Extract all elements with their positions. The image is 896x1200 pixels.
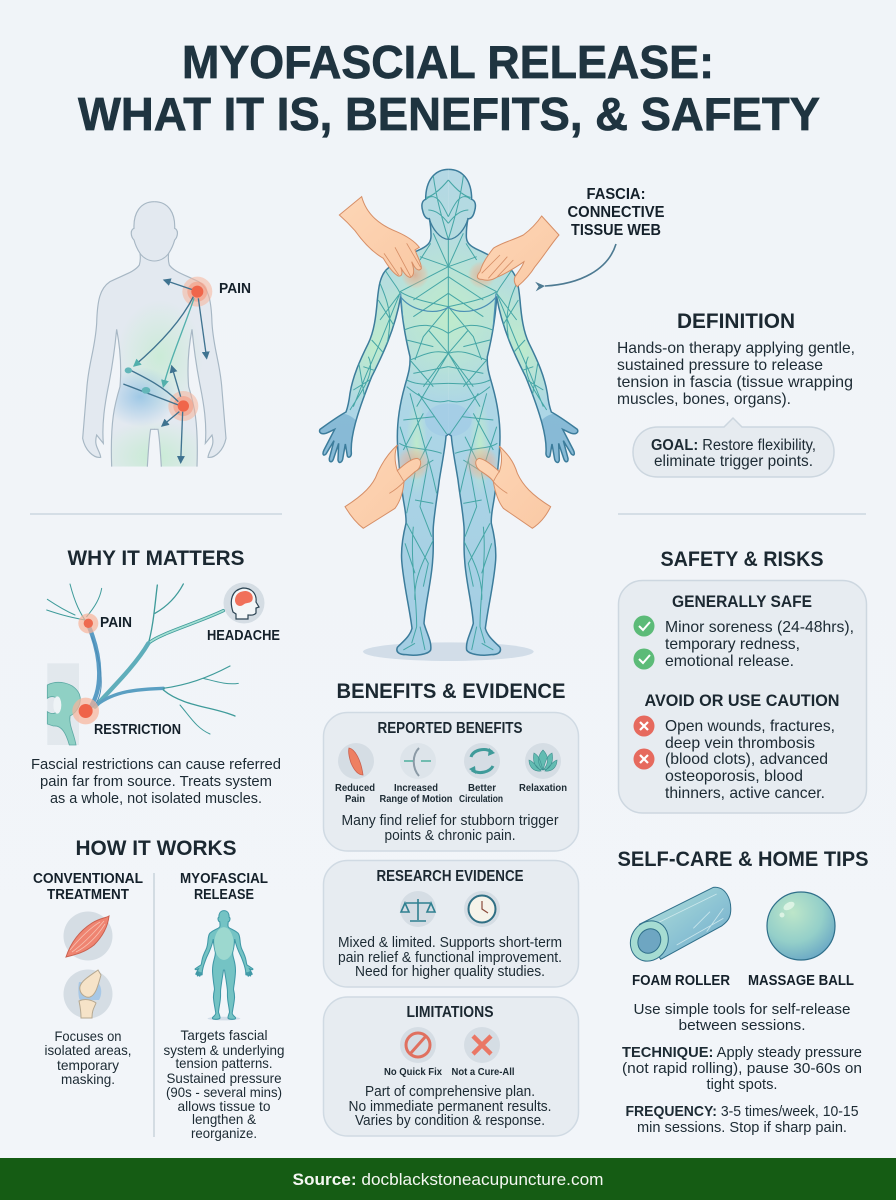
callout: goal (633, 418, 834, 477)
text: definition: muscles, bones, organs). (617, 391, 791, 408)
panel: safety and risks: GENERALLY SAFE (672, 592, 812, 611)
panel: reported benefits: Reduced (335, 782, 375, 794)
column: conventional treatment: Focuses on (54, 1028, 122, 1044)
hand: lower right (476, 446, 551, 528)
icon: knee joint (64, 970, 112, 1018)
icon: range of motion (400, 743, 436, 779)
panel: research evidence: RESEARCH EVIDENCE (376, 868, 524, 885)
column: myofascial release: reorganize. (191, 1125, 257, 1141)
label: fascia: CONNECTIVE (568, 204, 665, 221)
text: frequency: min sessions. Stop if sharp pain. (637, 1119, 847, 1136)
text: technique: TECHNIQUE: Apply steady pressure (622, 1044, 862, 1061)
icon: cross (634, 716, 654, 736)
panel: safety and risks: Minor soreness (24-48hrs), (665, 619, 854, 636)
icon: cross (634, 748, 654, 770)
panel: reported benefits: Relaxation (519, 782, 567, 794)
hand: upper right (477, 216, 559, 287)
hand: upper left (339, 197, 421, 277)
panel: limitations: No immediate permanent results. (348, 1098, 552, 1115)
panel: safety and risks: (blood clots), advanced (665, 751, 828, 768)
panel: research evidence (324, 860, 578, 987)
text: frequency: FREQUENCY: 3-5 times/week, 10-15 (626, 1103, 858, 1120)
panel: reported benefits: Circulation (459, 793, 503, 805)
panel: research evidence: pain relief & functional improvement. (338, 949, 562, 966)
panel: safety and risks: temporary redness, (665, 636, 800, 653)
panel: safety and risks: emotional release. (665, 653, 794, 670)
heading: benefits and evidence: BENEFITS & EVIDENCE (336, 680, 566, 703)
panel: limitations (324, 997, 578, 1136)
heading: why it matters: WHY IT MATTERS (68, 547, 244, 570)
panel: reported benefits: REPORTED BENEFITS (378, 720, 523, 737)
column: conventional treatment: CONVENTIONAL (33, 871, 143, 887)
panel: safety and risks: thinners, active cancer. (665, 785, 825, 802)
text: technique (622, 1044, 862, 1093)
column: conventional treatment: TREATMENT (47, 887, 129, 903)
column: myofascial release: RELEASE (194, 887, 254, 903)
column: conventional treatment: masking. (61, 1071, 115, 1087)
column: myofascial release (164, 871, 284, 1141)
column: myofascial release: (90s - several mins) (166, 1084, 282, 1100)
text: self-care intro (634, 1001, 850, 1034)
panel: safety and risks: osteoporosis, blood (665, 768, 803, 785)
label: fascia (568, 186, 665, 239)
text: why it matters: Fascial restrictions can cause referred (31, 756, 281, 773)
column: myofascial release: allows tissue to (178, 1098, 271, 1114)
icon: headache (224, 582, 264, 624)
arrow: fascia pointer (545, 244, 616, 286)
hand: lower left (345, 445, 421, 528)
icon: foam roller (623, 887, 731, 968)
label: pain: PAIN (219, 281, 251, 297)
text: why it matters: as a whole, not isolated muscles. (50, 790, 262, 807)
title: WHAT IT IS, BENEFITS, & SAFETY (78, 88, 820, 140)
panel: reported benefits: Many find relief for stubborn trigger (342, 812, 558, 829)
panel: limitations: LIMITATIONS (406, 1004, 494, 1021)
text: frequency (626, 1103, 858, 1136)
column: conventional treatment: temporary (57, 1057, 119, 1073)
text: self-care intro: Use simple tools for self-release (634, 1001, 850, 1018)
callout: goal: eliminate trigger points. (654, 453, 813, 470)
callout: goal: GOAL: Restore flexibility, (651, 437, 816, 454)
body (317, 169, 581, 655)
icon: muscle (64, 912, 112, 960)
fascia web lines (350, 176, 547, 650)
pressure glows (396, 261, 499, 481)
panel: reported benefits: Increased (394, 782, 438, 794)
icon: scales (400, 891, 436, 927)
column: conventional treatment (33, 871, 143, 1087)
heading: definition: DEFINITION (677, 310, 795, 333)
icon: small body (195, 911, 253, 1020)
text: definition: sustained pressure to release (617, 357, 823, 374)
panel: reported benefits: Range of Motion (380, 793, 452, 805)
icon: check (634, 616, 654, 636)
text: technique: (not rapid rolling), pause 30-60s on (622, 1060, 862, 1077)
text: definition: tension in fascia (tissue wrapping (617, 374, 853, 391)
text: why it matters: pain far from source. Treats system (40, 773, 272, 790)
divider right (618, 513, 866, 515)
label: foam roller: FOAM ROLLER (632, 973, 730, 989)
title: MYOFASCIAL RELEASE: (182, 36, 714, 88)
panel: reported benefits (324, 712, 578, 851)
label: fascia: FASCIA: (586, 186, 646, 203)
label: restriction: RESTRICTION (94, 722, 181, 738)
panel: safety and risks: AVOID OR USE CAUTION (644, 691, 840, 710)
label: headache: HEADACHE (207, 628, 280, 644)
column: myofascial release: MYOFASCIAL (180, 871, 268, 887)
panel: limitations: No Quick Fix (384, 1066, 442, 1078)
label: fascia: TISSUE WEB (571, 222, 661, 239)
footer: Source: docblackstoneacupuncture.com (292, 1170, 604, 1189)
panel: limitations: Not a Cure-All (452, 1066, 515, 1078)
icon: relaxation (525, 743, 561, 779)
figure: referred pain body (82, 201, 227, 467)
panel: research evidence: Mixed & limited. Supports short-term (338, 934, 562, 951)
icon: cross (464, 1027, 500, 1063)
icon: no sign (400, 1027, 436, 1063)
divider: how it works columns (153, 873, 155, 1137)
panel: safety and risks (618, 580, 866, 813)
panel: reported benefits: Pain (345, 793, 365, 805)
text: technique: tight spots. (706, 1076, 778, 1093)
ground shadow (363, 642, 534, 661)
divider left (30, 513, 282, 515)
column: myofascial release: Sustained pressure (166, 1070, 282, 1086)
panel: limitations: Part of comprehensive plan. (365, 1083, 535, 1100)
panel: safety and risks: Open wounds, fractures, (665, 718, 835, 735)
column: myofascial release: lengthen & (192, 1111, 257, 1127)
title (78, 36, 820, 140)
column: myofascial release: system & underlying (164, 1042, 284, 1058)
icon: check (634, 648, 654, 670)
text: self-care intro: between sessions. (678, 1017, 806, 1034)
panel: research evidence: Need for higher quality studies. (355, 963, 545, 980)
column: myofascial release: tension patterns. (176, 1055, 272, 1071)
footer (0, 1158, 896, 1200)
text: why it matters (31, 756, 281, 807)
icon: massage ball (767, 892, 835, 960)
text: definition (617, 340, 855, 408)
heading: how it works: HOW IT WORKS (76, 837, 236, 860)
label: massage ball: MASSAGE BALL (748, 973, 854, 989)
diagram: fascial network (47, 584, 238, 745)
icon: clock (464, 891, 500, 927)
label: network pain: PAIN (100, 615, 132, 631)
icon: reduced pain (338, 743, 374, 779)
panel: reported benefits: Better (468, 782, 496, 794)
column: myofascial release: Targets fascial (180, 1027, 268, 1043)
panel: reported benefits: points & chronic pain. (384, 827, 516, 844)
text: definition: Hands-on therapy applying gentle, (617, 340, 855, 357)
panel: limitations: Varies by condition & response. (355, 1112, 545, 1129)
column: conventional treatment: isolated areas, (44, 1042, 132, 1058)
panel: safety and risks: deep vein thrombosis (665, 735, 815, 752)
figure: fascia body with hands (317, 169, 581, 661)
heading: self-care: SELF-CARE & HOME TIPS (618, 848, 868, 871)
icon: circulation (464, 743, 500, 779)
heading: safety and risks: SAFETY & RISKS (660, 548, 824, 571)
